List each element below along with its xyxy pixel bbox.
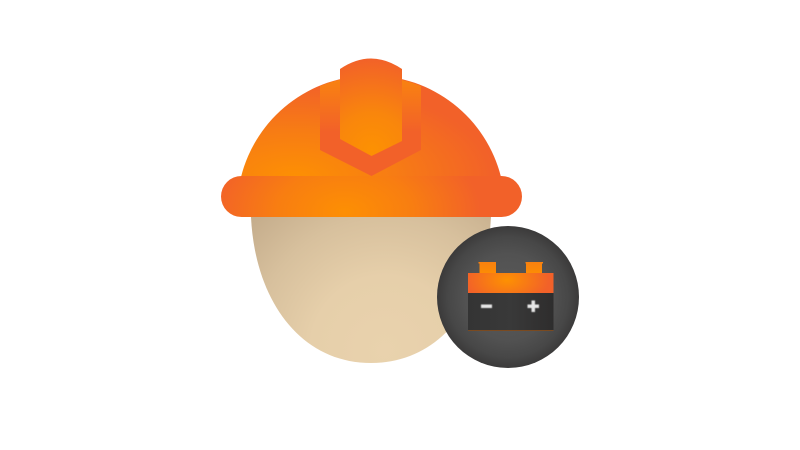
battery badge xyxy=(437,226,579,368)
left terminal xyxy=(478,262,496,273)
hard hat xyxy=(221,58,522,217)
plus sign xyxy=(528,300,539,312)
battery body xyxy=(468,293,554,331)
minus sign xyxy=(481,304,492,308)
badge circle xyxy=(437,226,579,368)
hat top ridge xyxy=(340,58,402,156)
hat brim xyxy=(221,176,522,217)
hat centre band xyxy=(320,76,421,176)
face xyxy=(251,217,491,363)
battery base line xyxy=(468,330,554,331)
battery icon xyxy=(468,262,554,331)
right terminal xyxy=(526,262,543,273)
hat dome xyxy=(241,75,501,177)
battery top xyxy=(468,273,554,293)
